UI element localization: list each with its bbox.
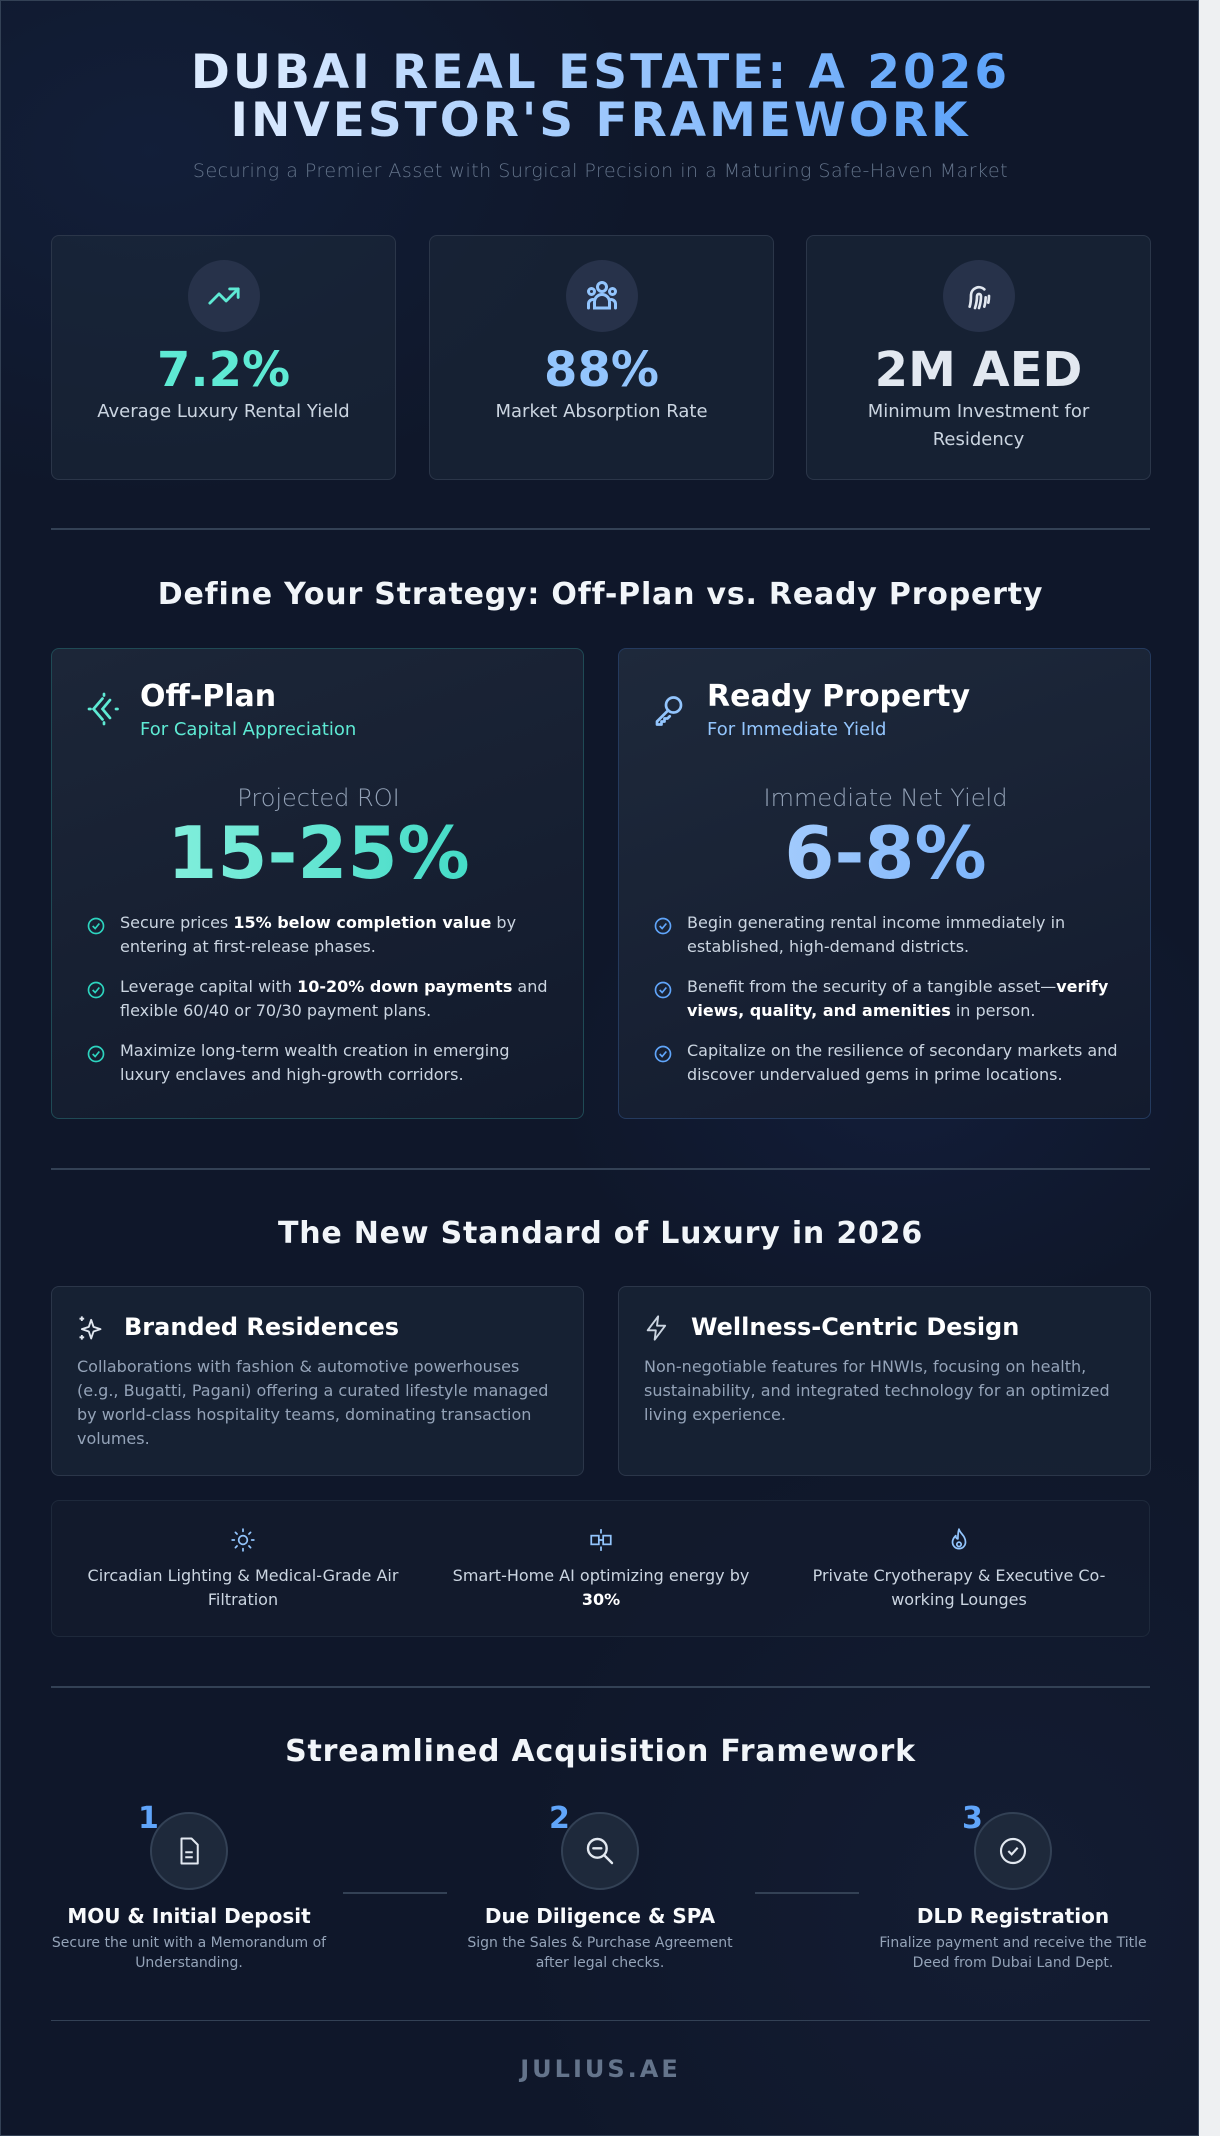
description: Non-negotiable features for HNWIs, focusing on health, sustainability, and integrated technology for an optimized living experience. xyxy=(644,1357,1110,1424)
metric value xyxy=(619,811,1152,895)
icon: users xyxy=(566,260,638,332)
stat value: 7.2% xyxy=(157,342,290,398)
stat card: rental yield xyxy=(51,235,396,480)
heading: framework: Streamlined Acquisition Framework xyxy=(285,1734,916,1769)
stat value: 2M AED xyxy=(875,342,1082,398)
icon: check circle xyxy=(974,1812,1052,1890)
connector arrow 2 xyxy=(755,1892,859,1894)
feature: cryotherapy xyxy=(813,1528,1105,1609)
text: DLD Registration xyxy=(917,1904,1109,1928)
text: 1 xyxy=(138,1801,159,1836)
metric label: Projected ROI xyxy=(237,784,400,812)
description: Collaborations with fashion & automotive powerhouses (e.g., Bugatti, Pagani) offering a curated lifestyle managed by world-class hospitality teams, dominating transaction volumes. xyxy=(77,1357,548,1448)
feature: smart home: Smart-Home AI optimizing energy by 30% xyxy=(453,1566,749,1609)
stat label: Market Absorption Rate xyxy=(495,401,708,422)
icon: off-plan xyxy=(88,692,119,726)
panel: ready property xyxy=(618,648,1151,1119)
panel: ready property: Begin generating rental income immediately in established, high-demand districts. xyxy=(687,913,1065,956)
text: Due Diligence & SPA xyxy=(485,1904,715,1928)
heading: luxury: The New Standard of Luxury in 2026 xyxy=(278,1216,923,1251)
heading: strategy: Define Your Strategy: Off-Plan vs. Ready Property xyxy=(158,577,1043,612)
panel: off-plan: Maximize long-term wealth creation in emerging luxury enclaves and high-growth corridors. xyxy=(120,1041,510,1084)
icon: search xyxy=(561,1812,639,1890)
feature: circadian: Circadian Lighting & Medical-Grade Air Filtration xyxy=(88,1566,398,1609)
panel: wellness xyxy=(618,1286,1151,1476)
panel: ready property: Benefit from the security of a tangible asset—verify views, quality, and amenities in person. xyxy=(687,977,1108,1020)
panel: branded residences xyxy=(51,1286,584,1476)
panel: off-plan xyxy=(51,648,584,1119)
icon: document xyxy=(150,1812,228,1890)
stat card: absorption xyxy=(429,235,774,480)
metric value: 15-25% xyxy=(167,811,470,895)
text: Sign the Sales & Purchase Agreement after legal checks. xyxy=(467,1935,733,1971)
panel subtitle: For Capital Appreciation xyxy=(140,719,356,740)
title: INVESTOR'S FRAMEWORK xyxy=(231,93,970,148)
panel subtitle: For Immediate Yield xyxy=(707,719,886,740)
panel: ready property: Capitalize on the resilience of secondary markets and discover undervalued gems in prime locations. xyxy=(687,1041,1118,1084)
stat label: Minimum Investment for Residency xyxy=(868,401,1089,450)
text: Finalize payment and receive the Title Deed from Dubai Land Dept. xyxy=(879,1935,1147,1971)
icon: key xyxy=(656,696,682,726)
bullet list xyxy=(88,913,548,1084)
panel: features row xyxy=(51,1500,1150,1637)
stat card: residency xyxy=(806,235,1151,480)
metric label: Immediate Net Yield xyxy=(764,784,1007,812)
footer brand: JULIUS.AE xyxy=(520,2055,681,2083)
panel title: Ready Property xyxy=(707,679,970,714)
text: MOU & Initial Deposit xyxy=(67,1904,311,1928)
text: 3 xyxy=(962,1801,983,1836)
panel: off-plan: Leverage capital with 10-20% down payments and flexible 60/40 or 70/30 payment plans. xyxy=(120,977,548,1020)
step 2 xyxy=(467,1801,733,1971)
metric value xyxy=(52,811,585,895)
title: DUBAI REAL ESTATE: A 2026 xyxy=(191,45,1010,100)
feature: circadian xyxy=(88,1528,398,1609)
feature: cryotherapy: Private Cryotherapy & Executive Co-working Lounges xyxy=(813,1566,1105,1609)
panel title: Off-Plan xyxy=(140,679,276,714)
panel title: Wellness-Centric Design xyxy=(691,1313,1019,1341)
text: Secure the unit with a Memorandum of Understanding. xyxy=(52,1935,326,1971)
stat label: Average Luxury Rental Yield xyxy=(97,401,350,422)
feature: smart home xyxy=(453,1529,749,1609)
icon: trending up xyxy=(188,260,260,332)
icon: sparkles xyxy=(80,1316,102,1340)
stat value: 88% xyxy=(544,342,659,398)
subtitle: Securing a Premier Asset with Surgical Precision in a Maturing Safe-Haven Market xyxy=(193,160,1008,182)
bullet list xyxy=(654,913,1118,1084)
title xyxy=(1,49,1200,145)
step 1 xyxy=(52,1801,326,1971)
metric value: 6-8% xyxy=(784,811,987,895)
text: 2 xyxy=(549,1801,570,1836)
connector arrow 1 xyxy=(343,1892,447,1894)
panel title: Branded Residences xyxy=(124,1313,399,1341)
icon: fingerprint xyxy=(943,260,1015,332)
step 3 xyxy=(879,1801,1147,1971)
icon: bolt xyxy=(646,1315,666,1341)
panel: off-plan: Secure prices 15% below completion value by entering at first-release phases. xyxy=(120,913,516,956)
